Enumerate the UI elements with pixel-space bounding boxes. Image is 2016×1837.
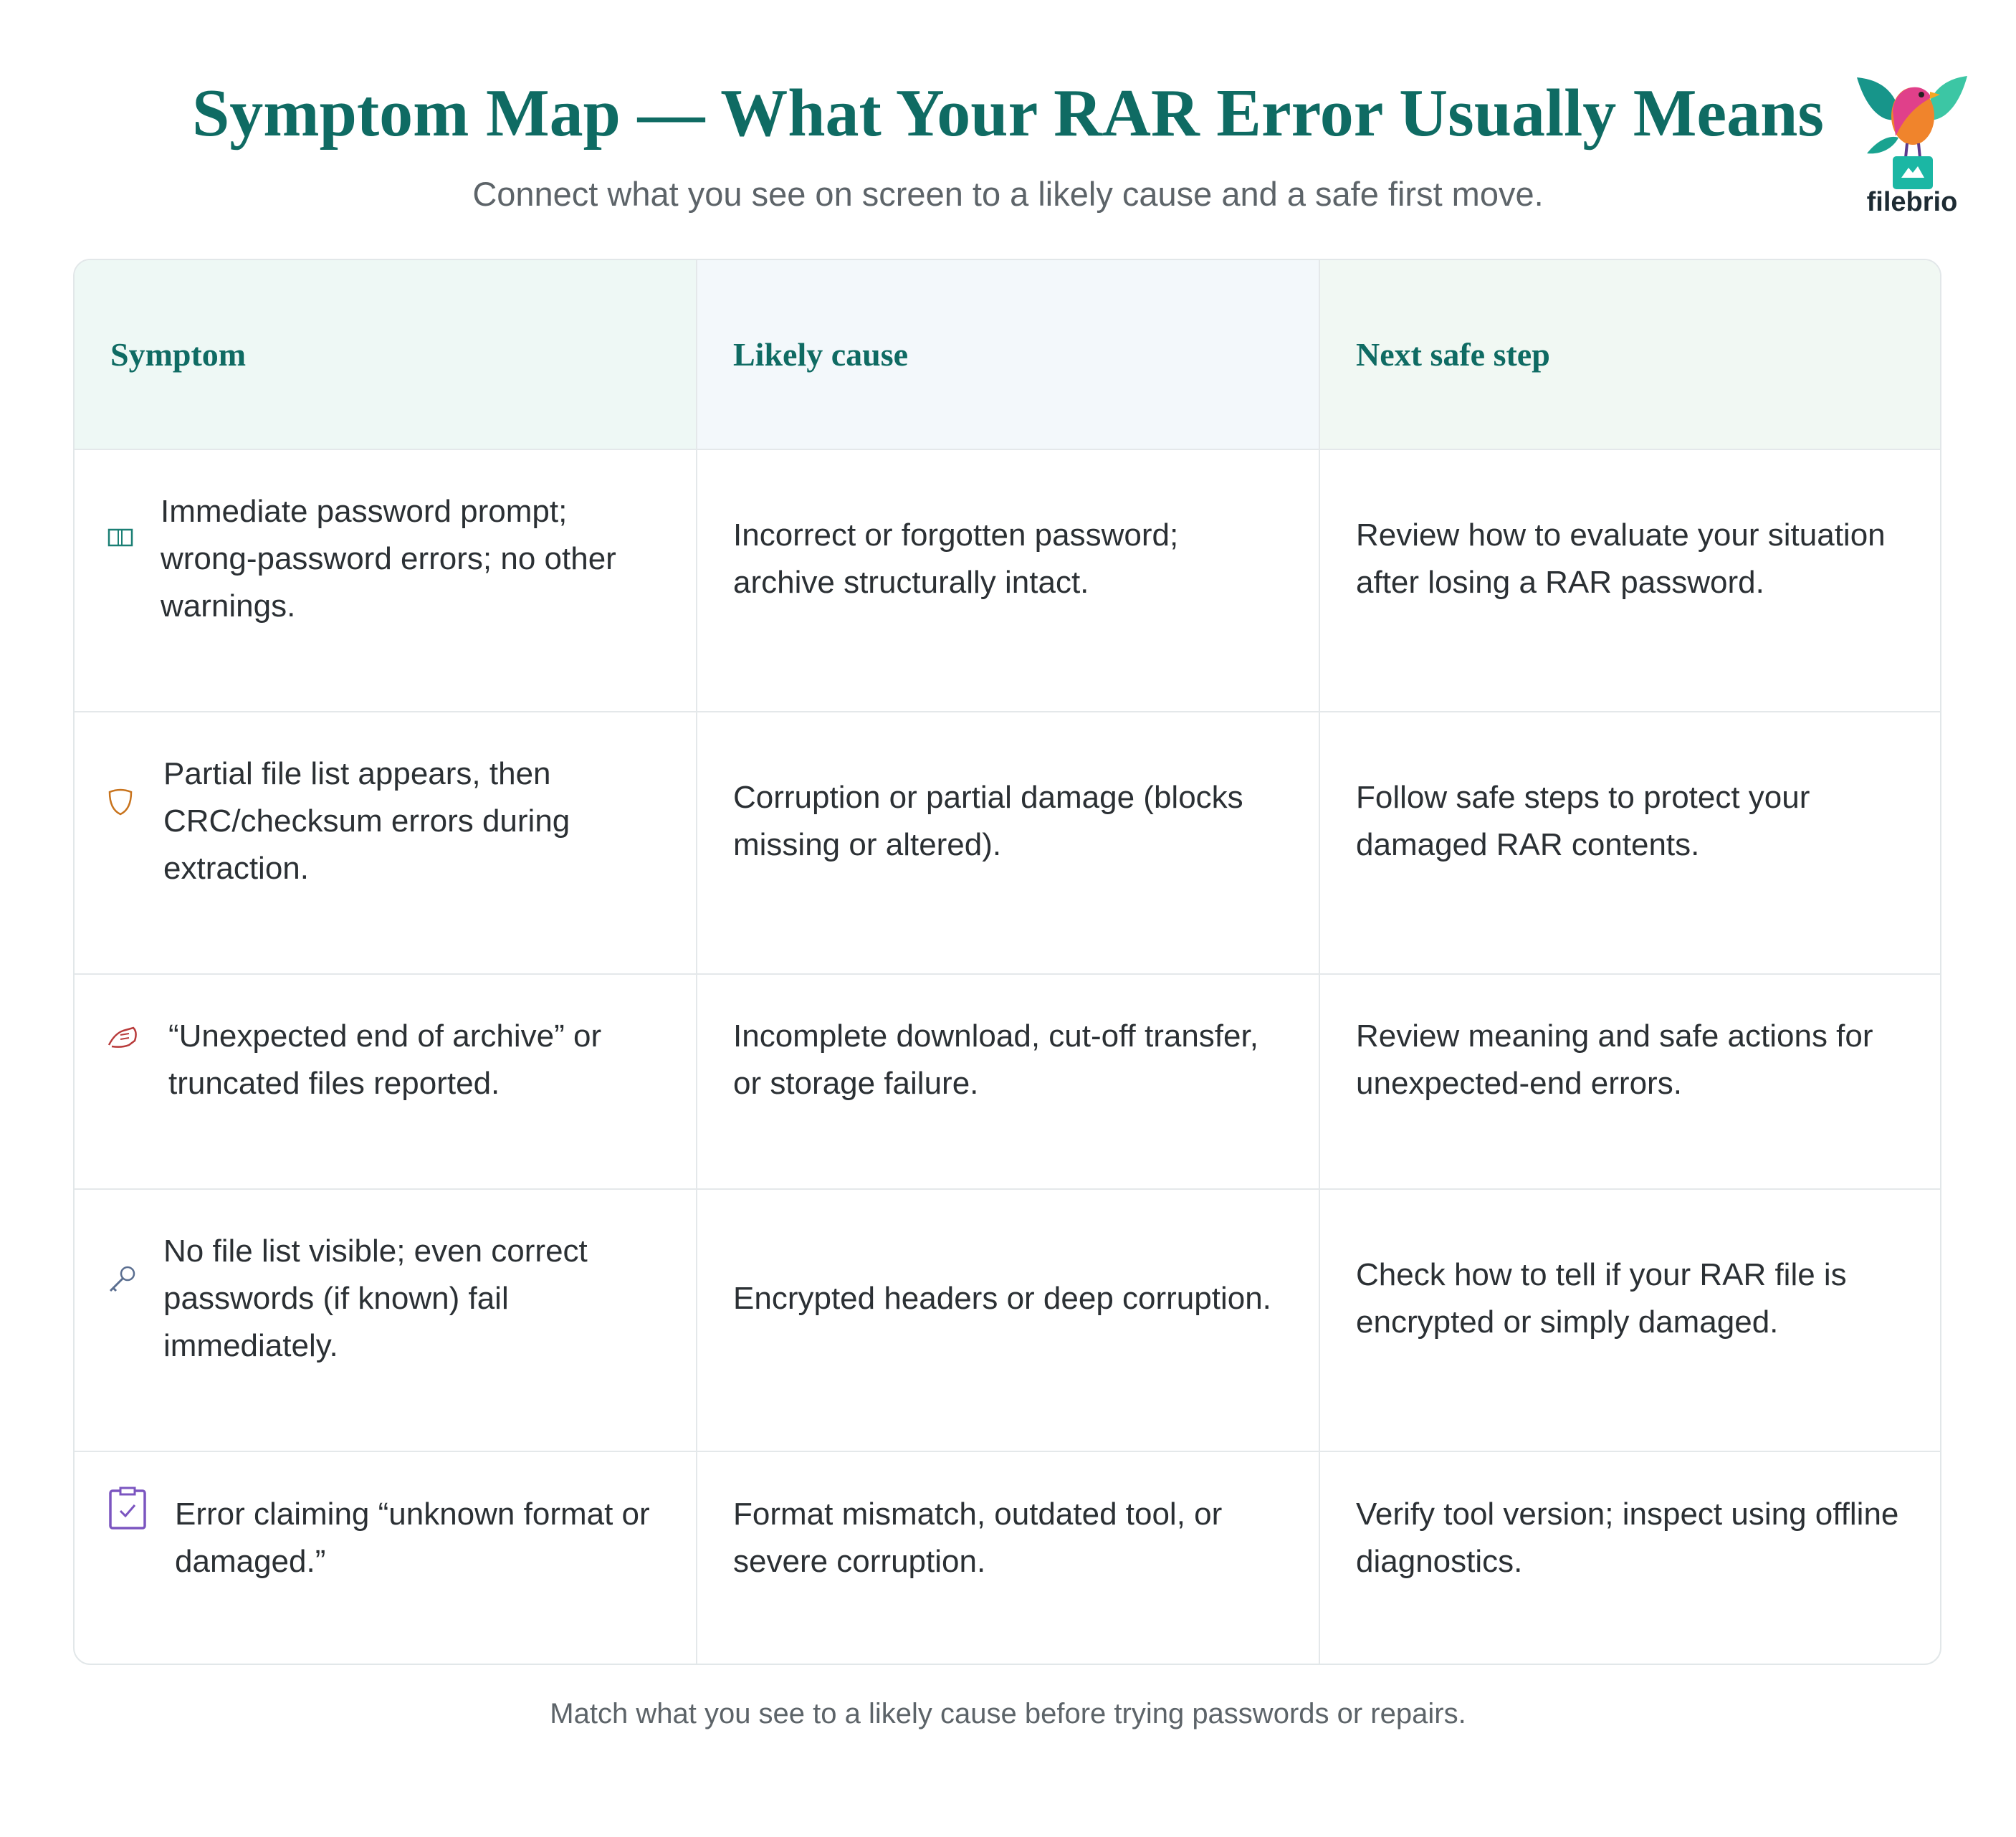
row 5: Error claiming “unknown format or damaged.” xyxy=(175,1497,650,1578)
row 4: Encrypted headers or deep corruption. xyxy=(733,1281,1271,1316)
row 1: Review how to evaluate your situation after losing a RAR password. xyxy=(1356,517,1886,600)
title: Symptom Map — What Your RAR Error Usually Means xyxy=(192,76,1824,151)
row 3: “Unexpected end of archive” or truncated files reported. xyxy=(168,1018,601,1101)
row 1: Incorrect or forgotten password; archive structurally intact. xyxy=(733,517,1178,600)
row 5: Format mismatch, outdated tool, or severe corruption. xyxy=(733,1497,1222,1578)
row 4: Check how to tell if your RAR file is encrypted or simply damaged. xyxy=(1356,1257,1847,1340)
row 4: No file list visible; even correct passwords (if known) fail immediately. xyxy=(163,1234,588,1363)
row 2 xyxy=(75,711,1940,973)
row 2: Corruption or partial damage (blocks missing or altered). xyxy=(733,780,1243,862)
row 5 xyxy=(75,1451,1940,1666)
row 2: Partial file list appears, then CRC/checksum errors during extraction. xyxy=(163,756,570,886)
row 1: Immediate password prompt; wrong-password errors; no other warnings. xyxy=(161,494,616,624)
header row xyxy=(75,260,1940,449)
logo: filebrio bird xyxy=(1857,76,1967,212)
row 1 xyxy=(75,449,1940,711)
row 4 xyxy=(75,1188,1940,1451)
footer note: Match what you see to a likely cause before trying passwords or repairs. xyxy=(550,1698,1466,1729)
row 2: Follow safe steps to protect your damaged RAR contents. xyxy=(1356,780,1810,862)
header row: Next safe step xyxy=(1356,335,1550,373)
subtitle: Connect what you see on screen to a likely cause and a safe first move. xyxy=(472,175,1544,213)
row 3: Review meaning and safe actions for unexpected-end errors. xyxy=(1356,1018,1873,1101)
header row: Likely cause xyxy=(733,335,908,373)
table xyxy=(73,259,1941,1665)
row 3 xyxy=(75,973,1940,1188)
header row: Symptom xyxy=(110,335,246,373)
row 5: Verify tool version; inspect using offline diagnostics. xyxy=(1356,1497,1898,1578)
row 3: Incomplete download, cut-off transfer, or storage failure. xyxy=(733,1018,1258,1101)
